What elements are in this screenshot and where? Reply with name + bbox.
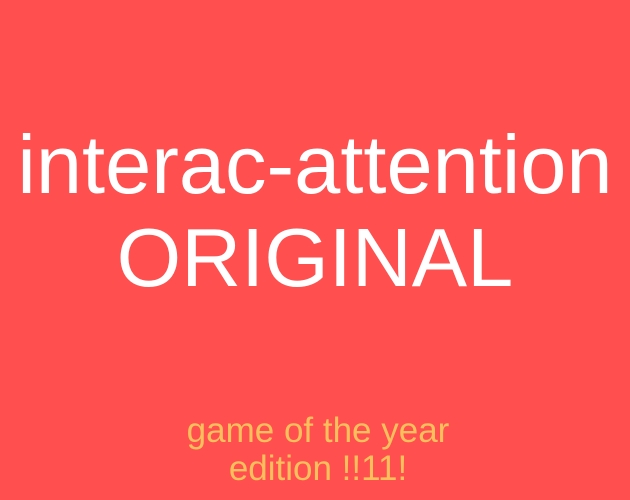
title: ORIGINAL [117,211,513,304]
subtitle: edition !!11! [229,449,407,488]
subtitle: game of the year [187,411,449,450]
subtitle [187,411,449,488]
title: interac-attention [17,118,613,211]
title [17,118,613,304]
